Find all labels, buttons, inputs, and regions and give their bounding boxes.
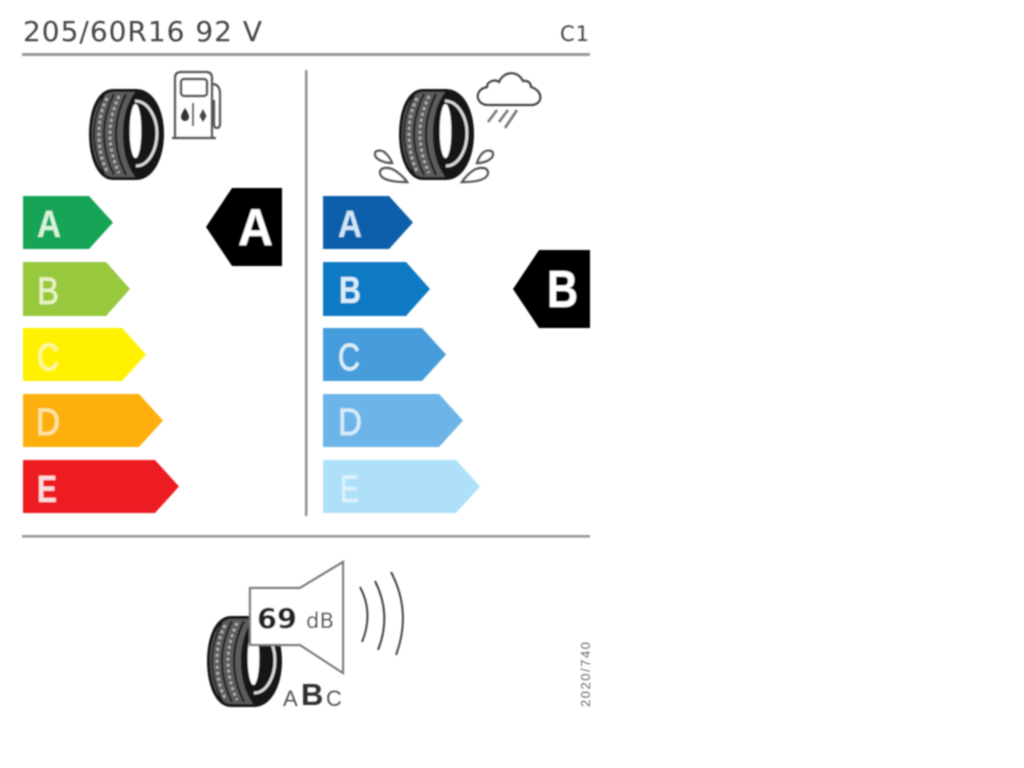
arrow D: D — [36, 402, 60, 444]
icon: tyre — [207, 616, 282, 707]
noise value: dB — [306, 609, 334, 633]
wet grip rating marker: B — [547, 261, 578, 319]
arrow C: C — [338, 337, 360, 379]
arrow B: B — [37, 271, 59, 313]
arrow D: D — [338, 402, 362, 444]
icon: sound waves — [360, 572, 403, 655]
noise class: C — [326, 686, 342, 711]
arrow A — [23, 196, 113, 249]
wet grip scale — [323, 196, 480, 513]
arrow D — [23, 394, 163, 447]
fuel rating marker: A — [238, 199, 273, 257]
panel: wet grip — [323, 73, 590, 513]
icon: tyre — [399, 89, 474, 180]
icon: speaker — [250, 562, 343, 673]
tyre size heading: 205/60R16 92 V — [23, 15, 262, 48]
arrow E: E — [37, 469, 57, 511]
fuel scale — [23, 196, 179, 513]
arrow A — [323, 196, 413, 249]
arrow E — [23, 460, 179, 513]
noise class: B — [301, 677, 323, 712]
icon: water splashes — [375, 151, 493, 182]
arrow B: B — [339, 270, 361, 312]
tyre class: C1 — [560, 22, 589, 46]
arrow E — [323, 460, 480, 513]
arrow B — [323, 262, 430, 316]
noise value: 69 — [257, 602, 297, 635]
noise class — [283, 677, 342, 712]
arrow E: E — [340, 469, 359, 511]
wet grip rating marker — [513, 250, 590, 328]
fuel rating marker — [206, 188, 282, 266]
arrow A: A — [338, 204, 362, 246]
arrow C — [323, 328, 446, 381]
icon: tyre — [89, 89, 164, 180]
icon: rain cloud — [478, 73, 540, 128]
icon: fuel pump — [172, 72, 220, 138]
regulation number: 2020/740 — [578, 642, 593, 707]
arrow C: C — [37, 337, 59, 379]
arrow B — [23, 262, 130, 316]
panel: external rolling noise — [207, 562, 403, 712]
noise value — [257, 602, 334, 635]
arrow D — [323, 394, 463, 447]
arrow C — [23, 328, 146, 381]
panel: fuel efficiency — [23, 72, 282, 513]
noise class: A — [283, 686, 298, 711]
arrow A: A — [37, 204, 61, 246]
